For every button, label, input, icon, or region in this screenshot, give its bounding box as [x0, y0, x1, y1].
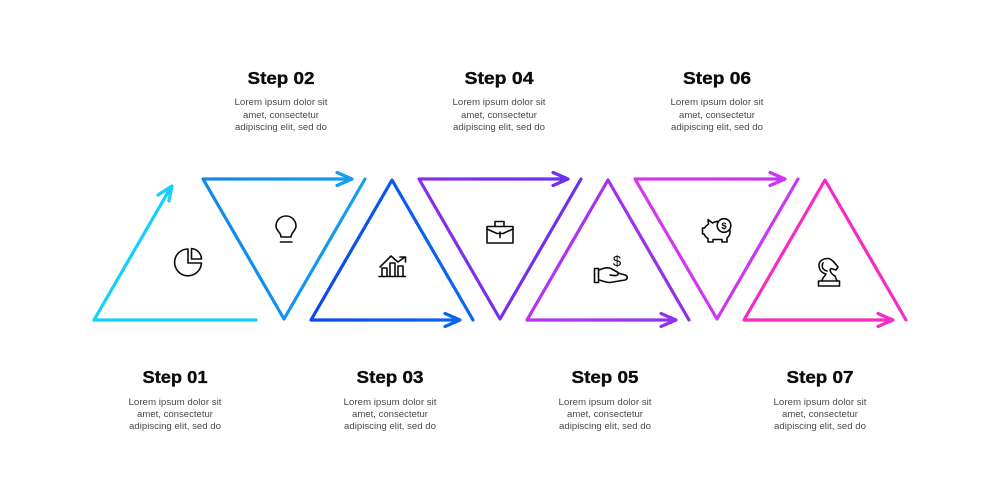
- icon: pie chart: [175, 248, 202, 276]
- text: step 04 body: [452, 97, 546, 132]
- text: step 05 body: adipiscing elit, sed do: [559, 421, 651, 431]
- text: step 01 body: amet, consectetur: [137, 409, 213, 419]
- triangle arrow 04: [419, 172, 581, 319]
- text: step 06 body: [670, 97, 764, 132]
- text: step 05 body: Lorem ipsum dolor sit: [558, 397, 652, 407]
- heading: step 05: Step 05: [572, 367, 639, 387]
- icon: briefcase: [487, 222, 513, 243]
- step 05 panel: [527, 180, 689, 431]
- text: step 07 body: amet, consectetur: [782, 409, 858, 419]
- text: step 02 body: [234, 97, 328, 132]
- heading: step 07: Step 07: [786, 367, 854, 387]
- text: step 03 body: adipiscing elit, sed do: [344, 421, 436, 431]
- text: step 05 body: [558, 397, 652, 431]
- step 04 panel: [419, 68, 581, 319]
- text: step 07 body: adipiscing elit, sed do: [774, 421, 866, 431]
- text: step 06 body: adipiscing elit, sed do: [671, 122, 763, 132]
- text: step 01 body: adipiscing elit, sed do: [129, 421, 221, 431]
- text: step 07 body: [774, 397, 867, 431]
- icon: hand with dollar: [594, 253, 627, 282]
- step 01 panel: [94, 186, 256, 431]
- text: step 07 body: Lorem ipsum dolor sit: [774, 397, 867, 407]
- triangle arrow 03: [311, 180, 473, 326]
- text: step 06 body: Lorem ipsum dolor sit: [670, 97, 764, 107]
- step 06 panel: [635, 68, 798, 319]
- text: step 02 body: adipiscing elit, sed do: [235, 122, 327, 132]
- text: step 04 body: amet, consectetur: [461, 110, 537, 120]
- heading: step 06: Step 06: [683, 68, 751, 88]
- icon: piggy bank with coin: $: [721, 221, 727, 232]
- triangle arrow 07: [744, 180, 906, 326]
- heading: step 03: Step 03: [356, 367, 424, 387]
- text: step 05 body: amet, consectetur: [567, 409, 643, 419]
- heading: step 02: Step 02: [248, 68, 315, 88]
- triangle arrow 06: [635, 172, 798, 319]
- step 07 panel: [744, 180, 906, 431]
- heading: step 01: Step 01: [142, 367, 208, 387]
- icon: light bulb: [276, 216, 296, 242]
- text: step 01 body: Lorem ipsum dolor sit: [128, 397, 222, 407]
- text: step 03 body: Lorem ipsum dolor sit: [344, 397, 437, 407]
- text: step 03 body: [344, 397, 437, 431]
- text: step 01 body: [128, 397, 222, 431]
- icon: growth chart: [379, 256, 406, 276]
- heading: step 04: Step 04: [464, 68, 534, 88]
- text: step 04 body: Lorem ipsum dolor sit: [452, 97, 546, 107]
- icon: chess knight: [818, 258, 840, 286]
- text: step 06 body: amet, consectetur: [679, 110, 755, 120]
- triangle arrow 01: [94, 186, 256, 320]
- triangle arrow 05: [527, 180, 689, 326]
- icon: hand with dollar: $: [613, 253, 622, 270]
- text: step 02 body: amet, consectetur: [243, 110, 319, 120]
- text: step 03 body: amet, consectetur: [352, 409, 428, 419]
- text: step 02 body: Lorem ipsum dolor sit: [234, 97, 328, 107]
- step 02 panel: [203, 68, 365, 319]
- step 03 panel: [311, 180, 473, 431]
- text: step 04 body: adipiscing elit, sed do: [453, 122, 545, 132]
- icon: piggy bank with coin: [702, 219, 731, 242]
- triangle arrow 02: [203, 172, 365, 319]
